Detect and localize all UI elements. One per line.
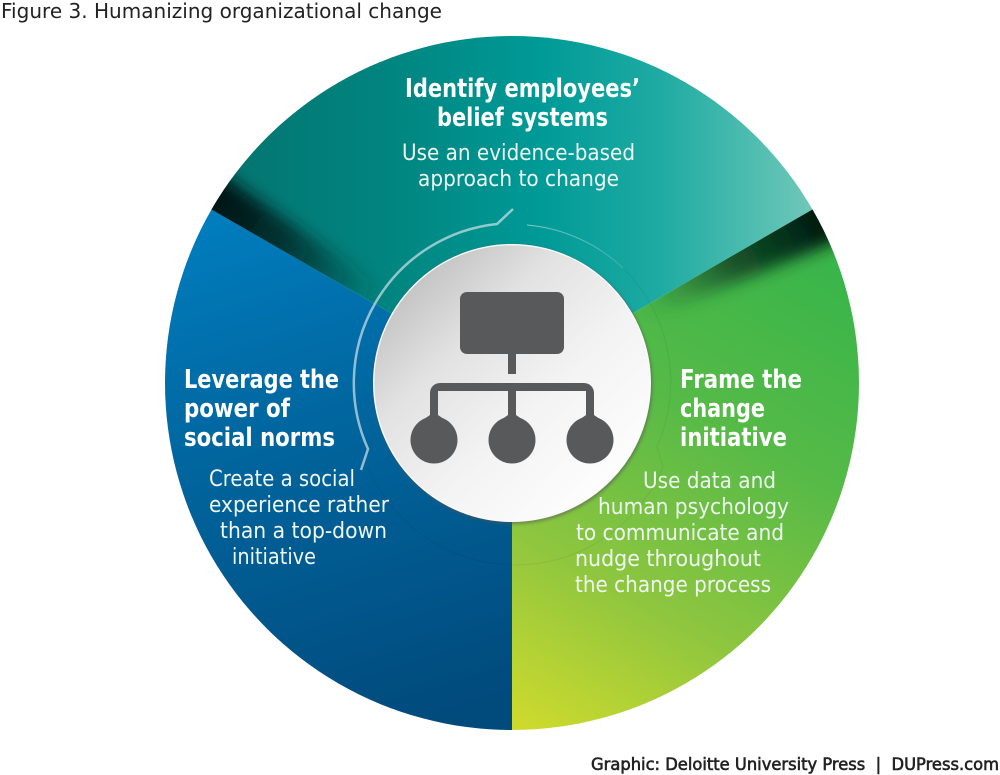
text block: frame the change initiative: Use data and [643, 468, 776, 494]
text block: frame the change initiative: the change process [575, 572, 771, 598]
panel: blue segment [165, 210, 512, 730]
text block: leverage the power of social norms: initiative [232, 544, 316, 570]
icon: organization chart [410, 292, 614, 464]
panel: green segment [512, 165, 860, 730]
callout arc: outer light ring [354, 209, 671, 565]
text block: identify employees' belief systems: Use an evidence-based [402, 140, 635, 166]
text block: frame the change initiative: initiative [680, 423, 787, 453]
text block: frame the change initiative: human psychology [598, 494, 789, 520]
text block: leverage the power of social norms: power of [184, 394, 291, 424]
donut chart [165, 36, 860, 730]
center circle [374, 245, 652, 524]
text block: frame the change initiative: to communicate and [576, 520, 784, 546]
text block: identify employees' belief systems: belief systems [437, 103, 608, 133]
text block: leverage the power of social norms [184, 365, 390, 570]
text block: leverage the power of social norms: Leverage the [184, 365, 339, 395]
text block: identify employees' belief systems: Identify employees’ [405, 74, 640, 104]
text block: leverage the power of social norms: social norms [184, 423, 335, 453]
text block: identify employees' belief systems: approach to change [418, 166, 619, 192]
text block: frame the change initiative: nudge throughout [575, 546, 761, 572]
text block: leverage the power of social norms: experience rather [209, 492, 390, 518]
text block: identify employees' belief systems [402, 74, 640, 192]
text block: frame the change initiative: change [680, 394, 765, 424]
text block: leverage the power of social norms: Create a social [209, 466, 355, 492]
source credit: Graphic: Deloitte University Press | DUPress.com [591, 755, 999, 774]
text block: leverage the power of social norms: than a top-down [220, 518, 387, 544]
text block: frame the change initiative: Frame the [680, 365, 802, 395]
panel: teal segment [212, 36, 812, 314]
text block: frame the change initiative [575, 365, 802, 598]
